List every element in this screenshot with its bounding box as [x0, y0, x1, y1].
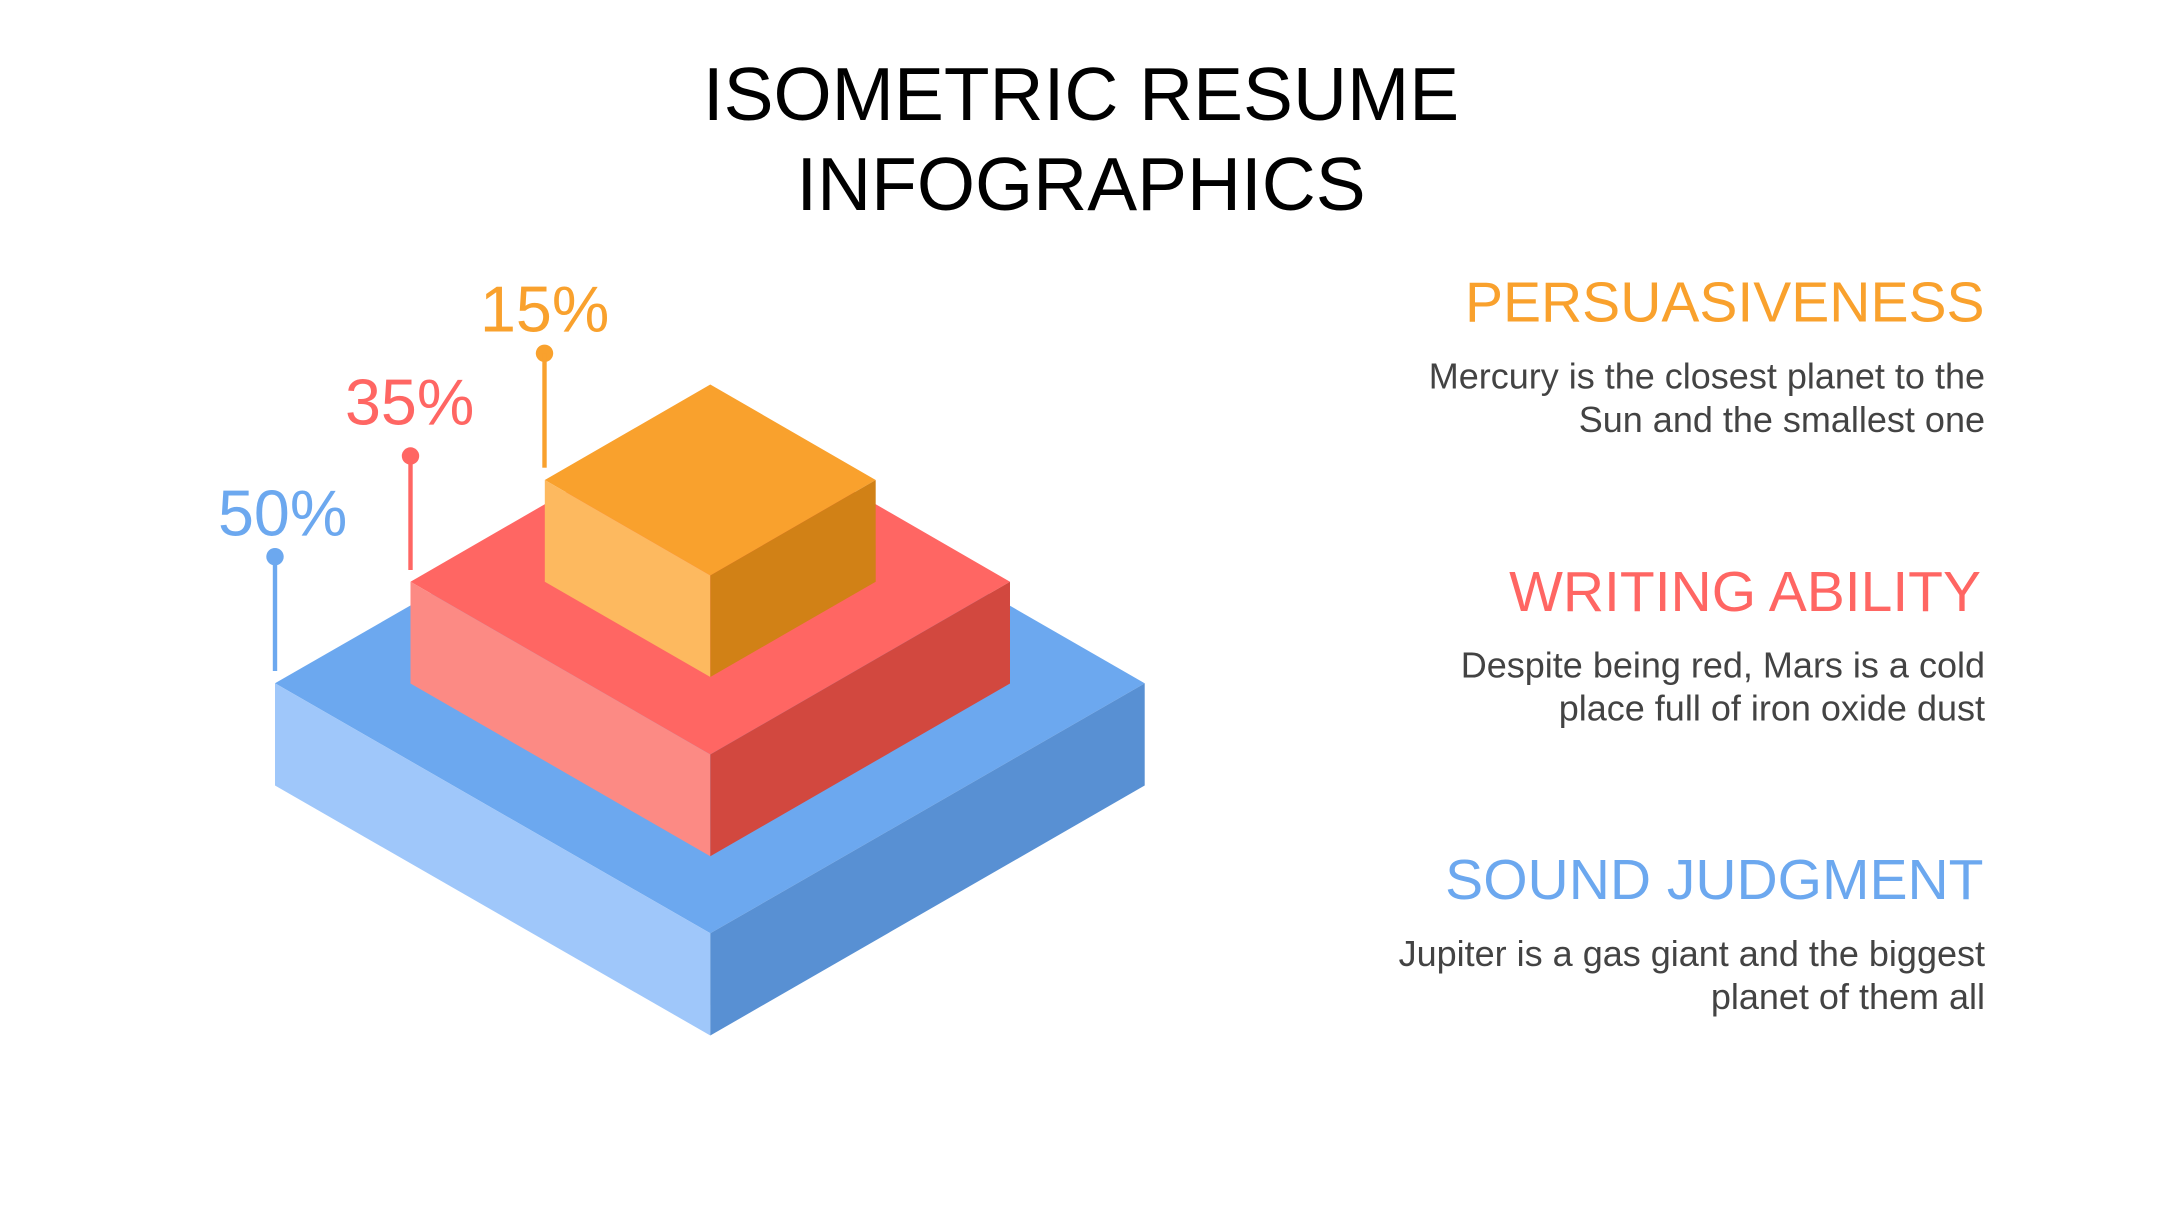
- text block: sound judgment: [1399, 848, 1985, 1017]
- pin: 15%: 15%: [480, 274, 609, 346]
- pin: 35%: [345, 366, 474, 570]
- text block: writing ability: [1461, 560, 1985, 729]
- layer: orange top 15%: [545, 384, 876, 677]
- heading: sound judgment: SOUND JUDGMENT: [1445, 848, 1984, 912]
- title: INFOGRAPHICS: [796, 142, 1366, 226]
- heading: persuasiveness: PERSUASIVENESS: [1465, 271, 1984, 335]
- description: sound judgment: [1399, 933, 1985, 1017]
- layer: red middle 35%: [410, 409, 1010, 856]
- title: [703, 52, 1459, 226]
- description: persuasiveness: [1429, 356, 1985, 440]
- description: persuasiveness: Mercury is the closest planet to the: [1429, 356, 1985, 397]
- pin: 50%: [218, 478, 347, 671]
- description: writing ability: [1461, 644, 1985, 729]
- description: writing ability: place full of iron oxide dust: [1559, 688, 1985, 729]
- text block: persuasiveness: [1429, 271, 1985, 440]
- pin: 35%: 35%: [345, 366, 474, 438]
- pin: 50%: 50%: [218, 478, 347, 550]
- description: sound judgment: Jupiter is a gas giant and the biggest: [1399, 933, 1985, 974]
- heading: writing ability: WRITING ABILITY: [1509, 560, 1981, 624]
- layer: blue base 50%: [275, 433, 1145, 1036]
- isometric pyramid chart: [275, 384, 1145, 1036]
- title: ISOMETRIC RESUME: [703, 52, 1459, 136]
- description: persuasiveness: Sun and the smallest one: [1579, 399, 1985, 440]
- pin: 15%: [480, 274, 609, 468]
- description: sound judgment: planet of them all: [1711, 976, 1985, 1017]
- description: writing ability: Despite being red, Mars is a cold: [1461, 644, 1985, 685]
